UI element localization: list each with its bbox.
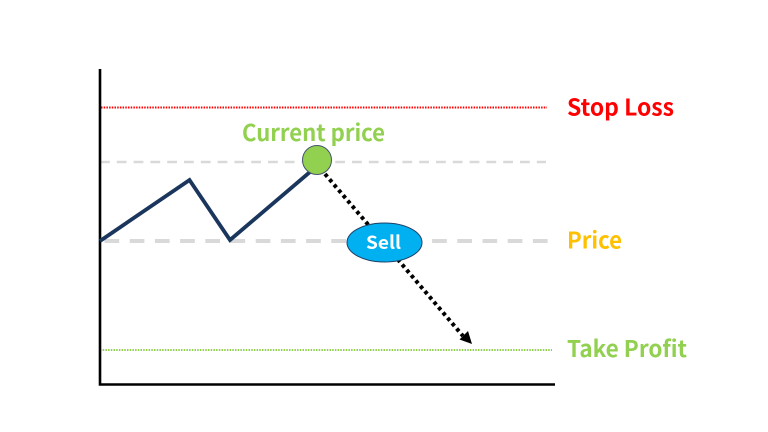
sell marker: Sell <box>366 229 401 255</box>
current price marker <box>302 146 332 174</box>
sell marker <box>347 223 422 262</box>
take profit level line <box>100 349 552 351</box>
entry price level line <box>104 239 548 243</box>
stop loss level line <box>101 106 547 108</box>
current price level line <box>100 161 546 163</box>
dotted sell arrow <box>325 174 472 344</box>
chart axes <box>100 69 555 384</box>
current price label: Current price <box>242 114 385 148</box>
price movement line <box>100 166 317 241</box>
take profit label: Take Profit <box>567 330 687 364</box>
price label: Price <box>567 222 622 256</box>
stop loss label: Stop Loss <box>567 88 674 122</box>
